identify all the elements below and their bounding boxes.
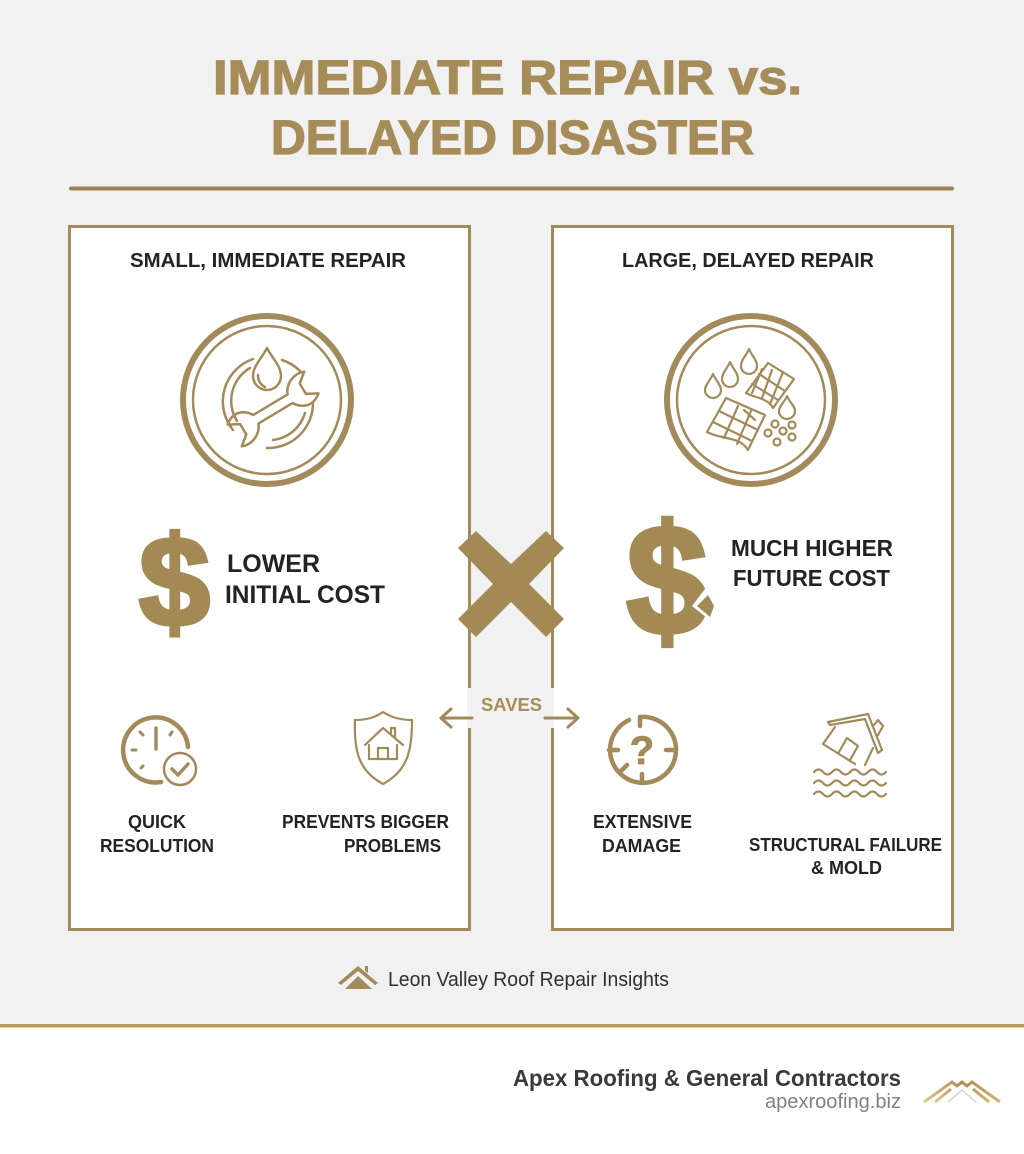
icon: broken dollar sign: $	[627, 493, 707, 667]
label: quick resolution: RESOLUTION	[100, 836, 214, 856]
label: extensive damage	[593, 812, 692, 856]
label: prevents bigger problems	[282, 812, 449, 856]
icon: dollar sign: $	[139, 511, 210, 654]
versus cross	[458, 531, 564, 637]
label: quick resolution: QUICK	[128, 812, 186, 832]
lower initial cost label: LOWER	[227, 550, 320, 578]
arrow: left	[441, 709, 472, 727]
panel heading: small immediate repair: SMALL, IMMEDIATE REPAIR	[130, 249, 406, 272]
saves label: SAVES	[481, 695, 542, 715]
icon: shingles and water drops badge	[667, 316, 835, 484]
title: DELAYED DISASTER	[271, 112, 754, 165]
title: IMMEDIATE REPAIR vs.	[213, 52, 802, 105]
footer company name: Apex Roofing & General Contractors	[513, 1065, 901, 1091]
label: structural failure and mold	[749, 835, 942, 878]
much higher future cost label: MUCH HIGHER	[731, 535, 893, 561]
icon: water drop and wrench badge	[183, 316, 351, 484]
icon: tilted house in flood	[814, 714, 886, 796]
panel: small immediate repair	[70, 226, 470, 930]
footer logo	[924, 1082, 1000, 1102]
insights line	[338, 966, 669, 991]
title	[213, 52, 802, 165]
panel heading: large delayed repair: LARGE, DELAYED REPAIR	[622, 249, 874, 272]
arrow: right	[545, 709, 578, 727]
much higher future cost label: FUTURE COST	[733, 565, 891, 591]
label: quick resolution	[100, 812, 214, 856]
label: prevents bigger problems: PREVENTS BIGGER	[282, 812, 449, 832]
icon: question mark gauge	[609, 717, 676, 783]
label: extensive damage: EXTENSIVE	[593, 812, 692, 832]
saves connector	[441, 688, 578, 728]
much higher future cost label	[731, 535, 893, 591]
footer band	[0, 1024, 1024, 1154]
label: prevents bigger problems: PROBLEMS	[344, 836, 441, 856]
footer website: apexroofing.biz	[765, 1091, 901, 1113]
icon: shield with house	[355, 712, 412, 784]
label: extensive damage: DAMAGE	[602, 836, 681, 856]
insights text: Leon Valley Roof Repair Insights	[388, 969, 669, 991]
title divider	[69, 186, 954, 190]
panel: large delayed repair	[552, 226, 952, 930]
icon: clock with check	[123, 717, 196, 785]
label: structural failure and mold: & MOLD	[811, 858, 882, 878]
icon: small roof	[338, 966, 378, 989]
lower initial cost label: INITIAL COST	[225, 581, 385, 609]
label: structural failure and mold: STRUCTURAL FAILURE	[749, 835, 942, 855]
lower initial cost label	[225, 550, 385, 609]
icon: question mark gauge: ?	[630, 729, 654, 773]
